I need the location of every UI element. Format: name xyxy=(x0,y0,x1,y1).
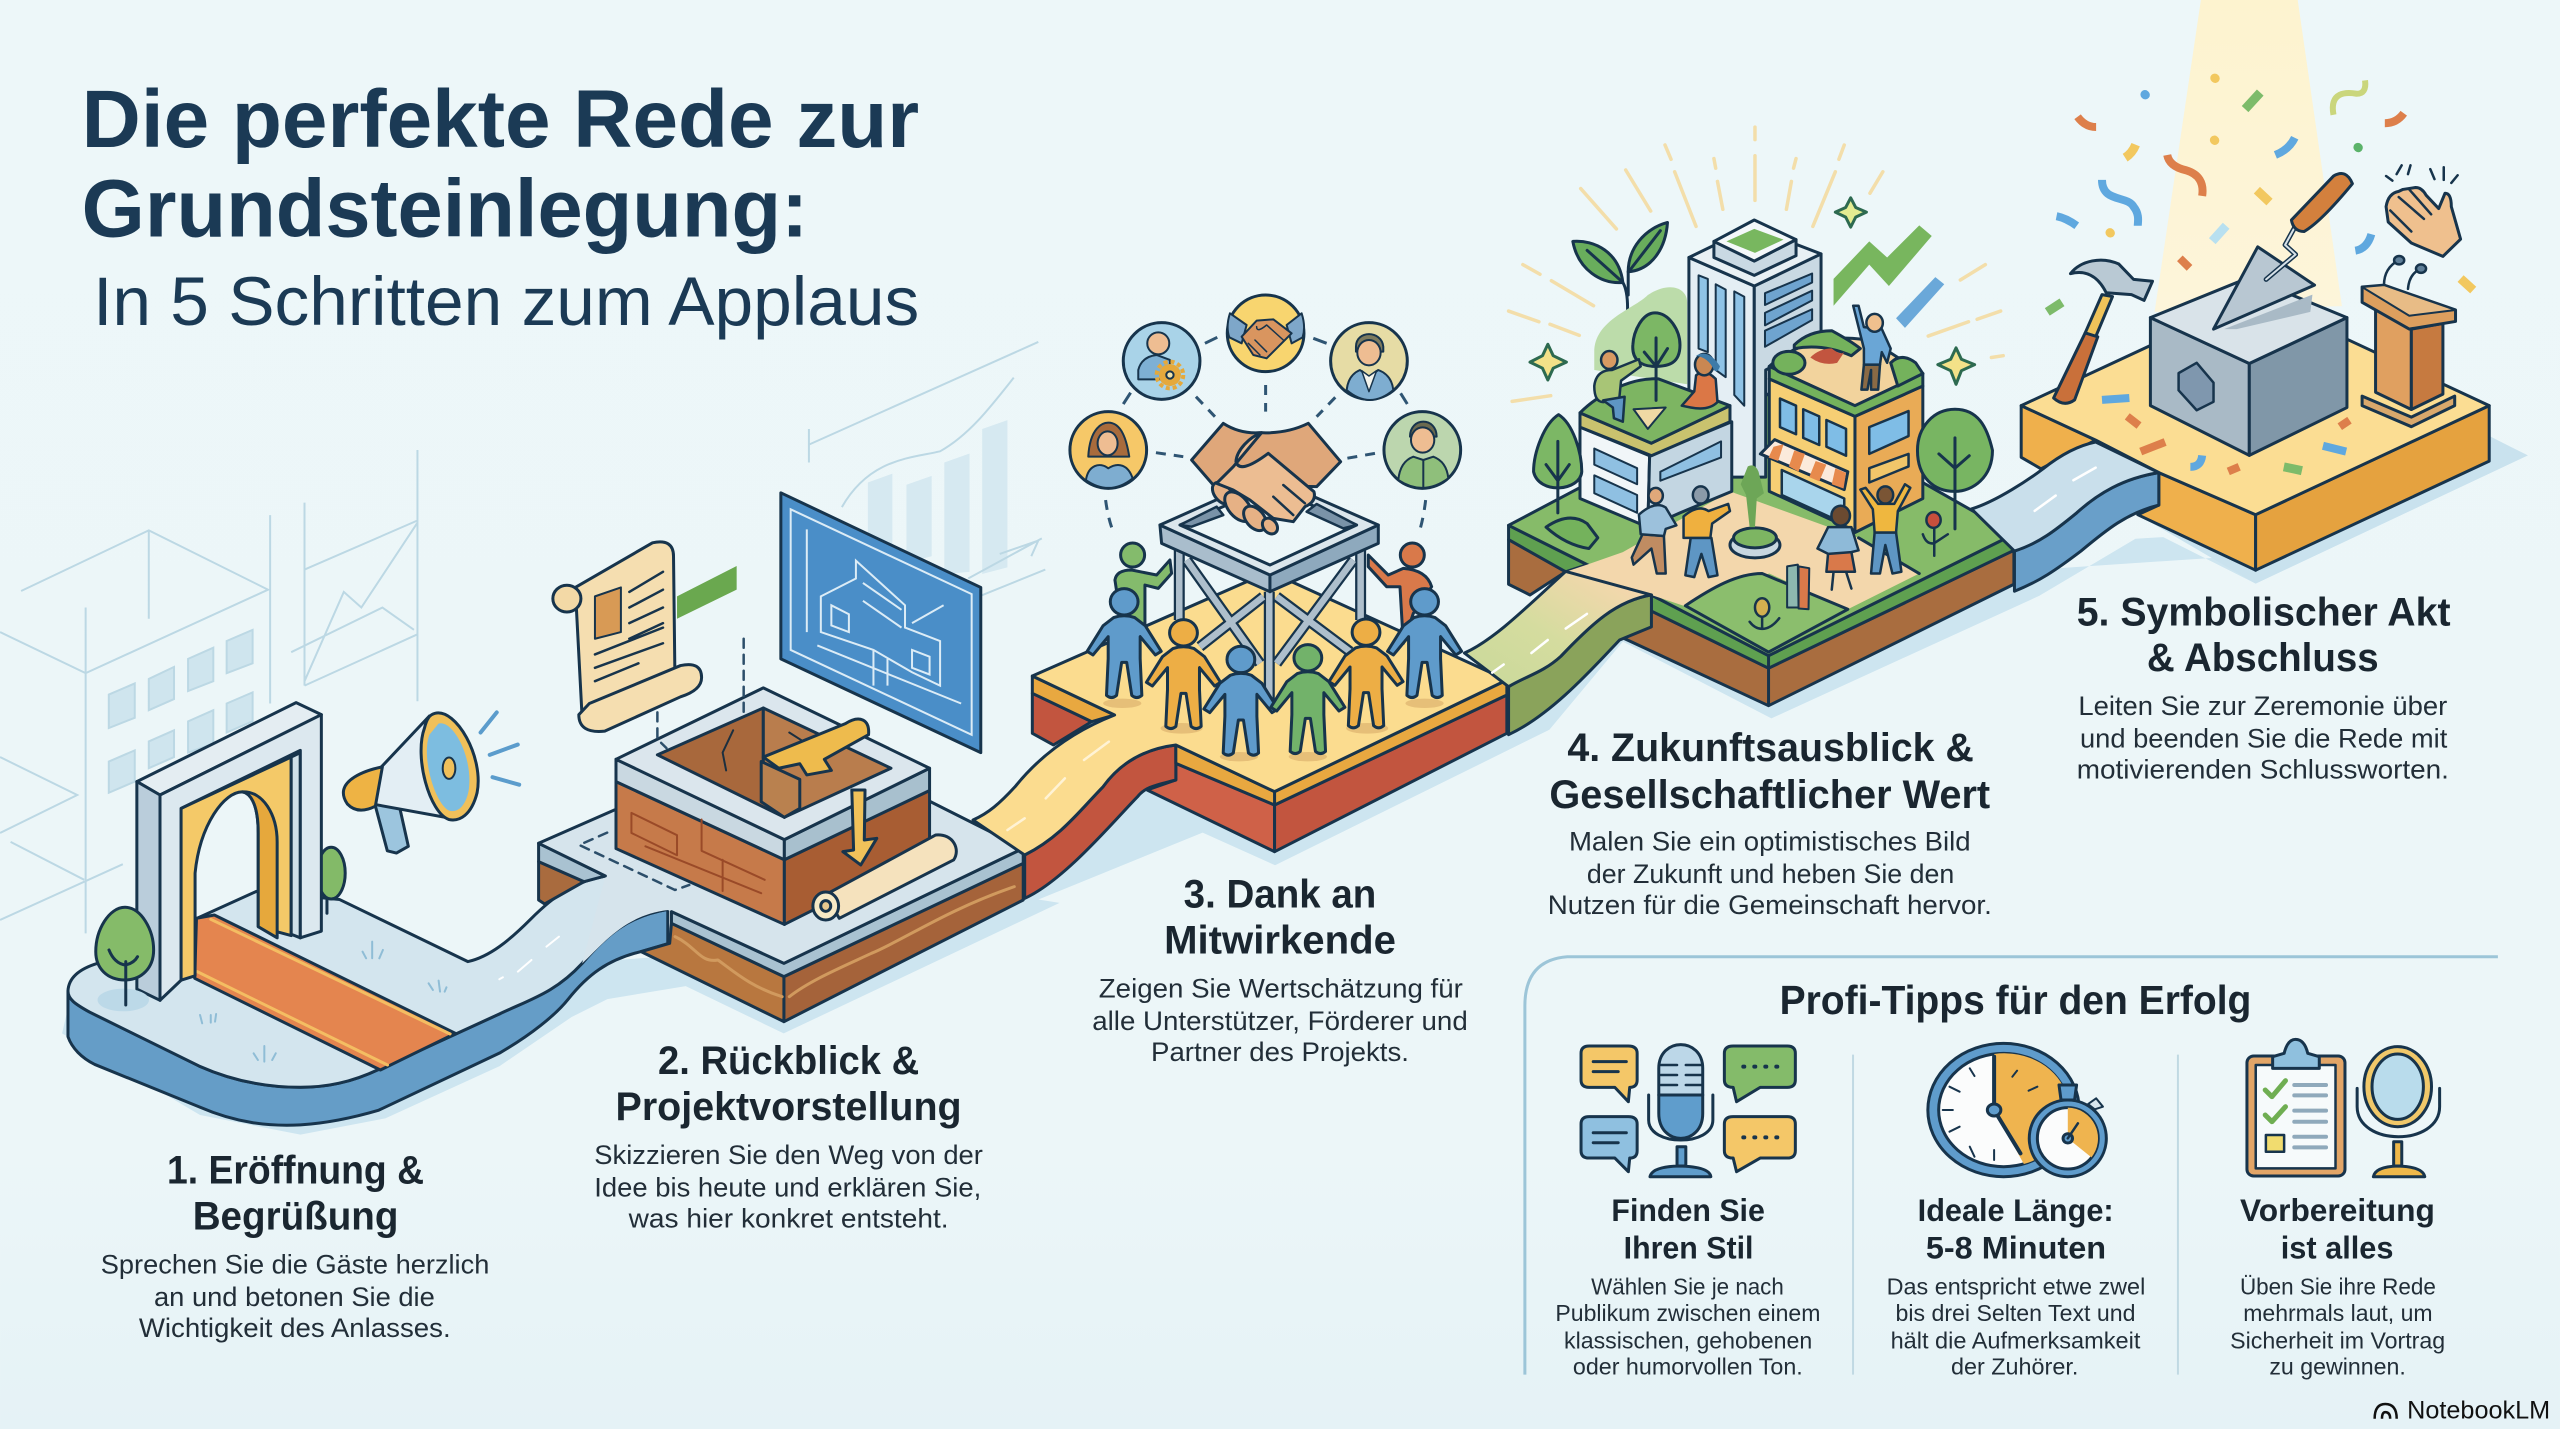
portrait: man in suit xyxy=(1331,323,1407,400)
statue xyxy=(1730,532,1780,558)
tip 2 text: der Zuhörer. xyxy=(1951,1354,2078,1380)
step 4 text: der Zukunft und heben Sie den xyxy=(1587,859,1954,889)
step 4 city with buildings, trees and people xyxy=(1534,220,1992,629)
tip 1 text xyxy=(1555,1192,1820,1380)
step 4 decoration: rays, leaf, sparkles, arrows xyxy=(1509,127,2003,401)
title xyxy=(82,74,919,340)
step 5 text: Leiten Sie zur Zeremonie über xyxy=(2078,691,2447,721)
step 1 platform with carpet, gate and tree xyxy=(68,703,668,1125)
trowel xyxy=(2214,247,2315,329)
step 2 platform and foundation xyxy=(539,639,1023,1022)
tip 3 text: mehrmals laut, um xyxy=(2243,1300,2433,1326)
step 1 icon: megaphone xyxy=(343,712,519,853)
handshake and network circles xyxy=(1070,295,1461,537)
tip 3 text: zu gewinnen. xyxy=(2269,1354,2406,1380)
gate xyxy=(137,703,321,1000)
icon: clock and stopwatch xyxy=(1928,1043,2106,1177)
step 2 text xyxy=(594,1039,983,1234)
step 1 text: an und betonen Sie die xyxy=(154,1282,435,1312)
portrait: person with gear xyxy=(1123,323,1200,399)
icon: clipboard and mirror xyxy=(2247,1039,2440,1177)
step 5 platform and road xyxy=(1972,297,2528,591)
rooftop tree xyxy=(1633,313,1680,366)
NotebookLM badge: NotebookLM xyxy=(2407,1397,2550,1425)
step 1 text: Wichtigkeit des Anlasses. xyxy=(139,1313,451,1343)
step 5 icons: foundation stone, trowel, hammer, lectern, clapping hands xyxy=(2054,165,2461,455)
step 4 platform xyxy=(1509,391,2014,706)
step 3 text: Mitwirkende xyxy=(1164,918,1396,962)
platform surface and road xyxy=(68,876,668,1087)
background sketch: rising chart xyxy=(809,342,1045,601)
step 1 text: Sprechen Sie die Gäste herzlich xyxy=(101,1249,489,1279)
road to step 5 xyxy=(2014,473,2159,591)
tree behind gate xyxy=(317,847,345,913)
hammer xyxy=(2085,295,2113,337)
scaffold xyxy=(1160,477,1378,703)
lectern xyxy=(2384,260,2421,289)
left tree xyxy=(96,907,154,1011)
small couple and plants xyxy=(1787,565,1799,607)
tip 1 text: Finden Sie xyxy=(1611,1192,1765,1228)
step 3 text: alle Unterstützer, Förderer und xyxy=(1092,1006,1468,1036)
step 4 text: 4. Zukunftsausblick & xyxy=(1567,726,1974,770)
tip 2 text: 5-8 Minuten xyxy=(1926,1230,2106,1266)
dashed links xyxy=(1106,385,1426,535)
step 4 text: Nutzen für die Gemeinschaft hervor. xyxy=(1548,890,1992,920)
tip 3 text: Vorbereitung xyxy=(2240,1192,2435,1228)
tip 3 text: ist alles xyxy=(2281,1230,2393,1266)
step 2 text: 2. Rückblick & xyxy=(658,1039,919,1083)
step 3 text: 3. Dank an xyxy=(1184,873,1376,917)
confetti xyxy=(2047,78,2473,471)
people circle holding hands xyxy=(1087,589,1462,755)
tip 2 text xyxy=(1887,1192,2145,1380)
step 5 text: & Abschluss xyxy=(2147,636,2379,680)
left building xyxy=(1580,427,1650,527)
spotlight xyxy=(2155,0,2342,312)
tip 1 text: Wählen Sie je nach xyxy=(1591,1274,1784,1300)
step 4 text: Gesellschaftlicher Wert xyxy=(1549,773,1990,817)
step 1 text: Begrüßung xyxy=(193,1194,398,1238)
step 5 text: 5. Symbolischer Akt xyxy=(2077,590,2451,634)
step 4 text: Malen Sie ein optimistisches Bild xyxy=(1569,827,1971,857)
stone xyxy=(2150,318,2249,455)
step 3 text: Partner des Projekts. xyxy=(1151,1037,1409,1067)
portrait: handshake xyxy=(1227,295,1304,372)
step 2 text: Projektvorstellung xyxy=(616,1085,962,1129)
portrait: woman xyxy=(1070,412,1147,488)
circle portraits xyxy=(1070,295,1461,488)
step 4 text xyxy=(1548,726,1992,920)
unrolled plan and yellow arrow xyxy=(813,790,956,920)
icon: microphone and speech bubbles xyxy=(1581,1045,1795,1177)
title: In 5 Schritten zum Applaus xyxy=(93,262,919,340)
brick foundation xyxy=(616,639,930,924)
rooftop people xyxy=(1594,359,1641,402)
roof person xyxy=(1861,365,1880,390)
platform shadows xyxy=(62,436,2527,1135)
step 3 text: Zeigen Sie Wertschätzung für xyxy=(1099,974,1463,1004)
portrait: man in green xyxy=(1384,412,1461,488)
step 1 text: 1. Eröffnung & xyxy=(167,1149,424,1193)
step 2 text: Idee bis heute und erklären Sie, xyxy=(594,1173,981,1203)
slab side and soil xyxy=(539,800,1023,1022)
panel: Profi-Tipps xyxy=(1525,957,2498,1380)
trees xyxy=(1534,415,1582,488)
title: Grundsteinlegung: xyxy=(82,164,808,255)
step 3 text xyxy=(1092,873,1468,1067)
clapping hands xyxy=(2386,188,2461,256)
tip 1 text: oder humorvollen Ton. xyxy=(1573,1354,1803,1380)
platform side xyxy=(68,909,668,1125)
tip 2 text: hält die Aufmerksamkeit xyxy=(1891,1328,2141,1354)
step 2 icon: green tube and scroll xyxy=(553,542,737,732)
tip 3 text: Sicherheit im Vortrag xyxy=(2230,1328,2445,1354)
tip 3 text: Üben Sie ihre Rede xyxy=(2240,1274,2436,1300)
step 2 text: was hier konkret entsteht. xyxy=(628,1204,949,1234)
panel heading: Profi-Tipps für den Erfolg xyxy=(1780,977,2251,1023)
step 5 text: und beenden Sie die Rede mit xyxy=(2080,724,2448,754)
right building xyxy=(1769,379,1855,531)
tip 2 text: Das entspricht etwe zwel xyxy=(1887,1274,2145,1300)
step 1 text xyxy=(101,1149,489,1343)
title: Die perfekte Rede zur xyxy=(82,74,919,165)
green blob backdrop xyxy=(1594,287,1687,384)
background sketch: left building and chart xyxy=(0,450,417,933)
road from step 3 to 4 xyxy=(1464,571,1651,735)
tip 3 text xyxy=(2230,1192,2445,1380)
tower xyxy=(1689,257,1754,477)
tip 1 text: klassischen, gehobenen xyxy=(1564,1328,1812,1354)
tip 1 text: Publikum zwischen einem xyxy=(1555,1300,1820,1326)
tip 2 text: Ideale Länge: xyxy=(1918,1192,2114,1228)
step 5 text xyxy=(2077,590,2451,785)
tip 1 text: Ihren Stil xyxy=(1624,1230,1753,1266)
tip 2 text: bis drei Selten Text und xyxy=(1895,1300,2135,1326)
plaza people xyxy=(1632,534,1666,574)
step 3 platform and road xyxy=(973,572,1507,898)
step 2 icon: blueprint xyxy=(781,493,981,753)
people behind scaffold xyxy=(1115,543,1432,643)
step 2 text: Skizzieren Sie den Weg von der xyxy=(594,1140,983,1170)
step 5 text: motivierenden Schlussworten. xyxy=(2077,755,2449,785)
handshake xyxy=(1192,423,1341,537)
carpet xyxy=(195,915,559,1070)
